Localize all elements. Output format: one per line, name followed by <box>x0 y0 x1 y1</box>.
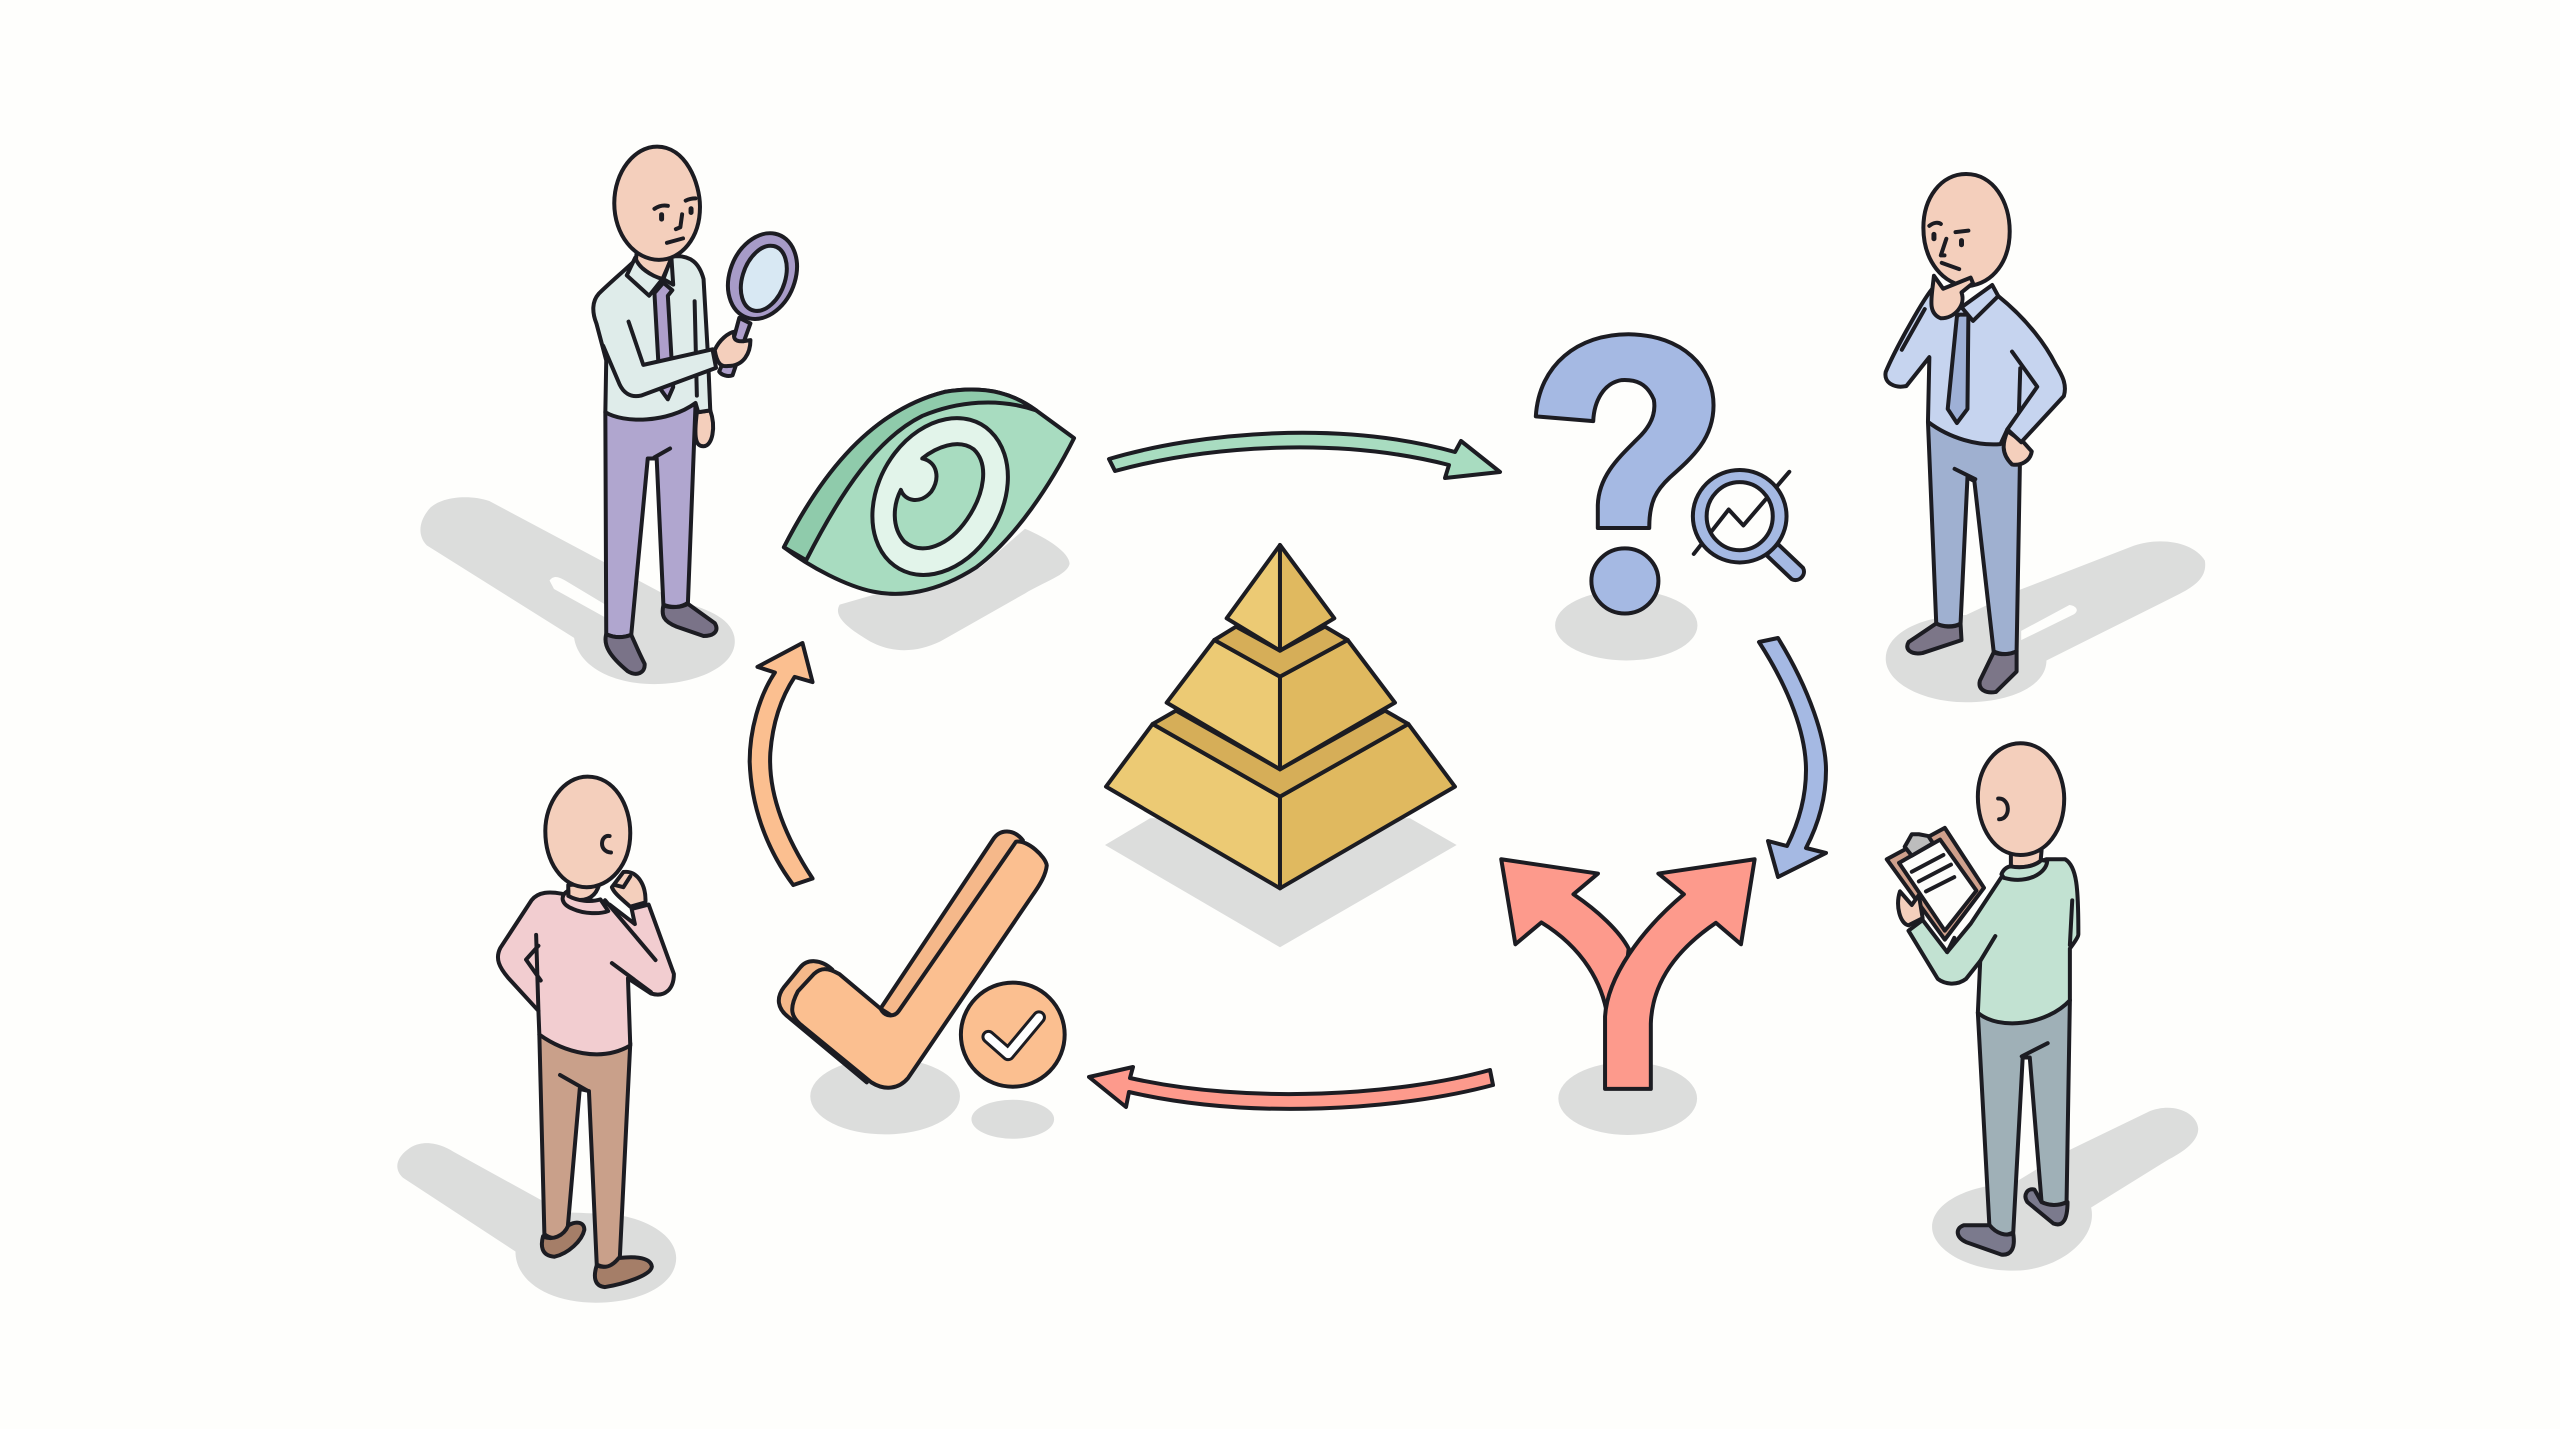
clip <box>1905 834 1933 856</box>
ear <box>602 836 611 853</box>
right branch and stem <box>1605 859 1755 1089</box>
person: analyst with magnifying glass <box>420 147 807 684</box>
question shadow <box>1555 590 1697 660</box>
sleeve line <box>695 301 697 396</box>
paper lines <box>1912 855 1954 891</box>
central pyramid <box>1105 545 1457 947</box>
trousers <box>539 1035 630 1267</box>
person: reviewer with clipboard <box>1887 743 2198 1271</box>
eye icon <box>784 390 1074 650</box>
left branch <box>1501 859 1629 1016</box>
left shoe <box>1958 1225 2014 1255</box>
hand on handle <box>715 332 750 366</box>
magnifier ring <box>718 227 807 325</box>
shadow of reviewer <box>1932 1108 2198 1271</box>
middle left face <box>1167 640 1280 769</box>
pupil <box>895 444 983 548</box>
small magnifier ring <box>1693 470 1787 562</box>
crease <box>654 448 670 457</box>
head <box>614 147 700 260</box>
check back layer <box>779 831 1023 1082</box>
collar <box>2001 860 2047 880</box>
left shoe <box>542 1223 584 1257</box>
middle right face <box>1280 640 1395 769</box>
collar left <box>627 258 662 296</box>
base right face <box>1280 724 1455 888</box>
arm <box>603 322 716 396</box>
trousers <box>1978 1000 2070 1235</box>
tie <box>1948 315 1968 423</box>
chin hand <box>612 872 645 907</box>
base ledge <box>1153 711 1408 797</box>
neck <box>636 253 671 279</box>
top left face <box>1227 545 1280 651</box>
shirt <box>593 256 710 420</box>
right shoe <box>2026 1189 2068 1224</box>
question mark icon <box>1536 334 1804 660</box>
head <box>1923 174 2010 286</box>
right shoe <box>595 1257 652 1287</box>
neck <box>2011 850 2042 867</box>
board <box>1887 828 1984 940</box>
arm detail lines <box>1902 309 2037 429</box>
crease <box>2022 1043 2048 1056</box>
iris <box>849 404 1031 590</box>
face <box>654 198 696 243</box>
ear <box>1998 799 2008 819</box>
trousers <box>1928 422 2020 654</box>
neck <box>568 883 599 900</box>
shadow <box>397 1143 676 1303</box>
face <box>1929 223 1968 269</box>
badge tick fill <box>988 1017 1039 1054</box>
collar <box>1961 285 1998 321</box>
trousers <box>605 405 696 637</box>
fork shadow <box>1558 1062 1697 1135</box>
question hook <box>1536 334 1714 528</box>
shadow of thinker <box>1886 541 2205 702</box>
check front layer <box>792 841 1047 1088</box>
magnifier handle <box>719 318 750 376</box>
right shoe <box>663 604 716 636</box>
hip hand <box>2004 431 2032 465</box>
checkmark icon <box>779 831 1065 1139</box>
eye rim <box>784 390 1036 560</box>
head <box>1978 743 2064 855</box>
check shadow <box>810 1058 960 1134</box>
crease <box>560 1075 587 1090</box>
chart line <box>1694 472 1789 554</box>
collar <box>563 891 608 913</box>
collar right <box>663 258 673 285</box>
tie <box>654 283 673 399</box>
arrow: orange check to eye <box>750 643 813 885</box>
fingers <box>615 876 630 887</box>
arrow: red decision to check <box>1089 1067 1493 1109</box>
arrow: green observe to question <box>1109 433 1500 478</box>
right shoe <box>1980 651 2017 692</box>
question dot <box>1591 548 1658 613</box>
person: thinker with hand on chin <box>1885 174 2205 702</box>
paper <box>1899 840 1976 931</box>
middle ledge <box>1214 627 1348 677</box>
chin hand <box>1931 276 1973 318</box>
clipboard <box>1887 828 1984 940</box>
fork arrow icon <box>1501 859 1755 1135</box>
sweater <box>1908 859 2078 1023</box>
left shoe <box>605 634 645 674</box>
sweater <box>498 893 674 1054</box>
far hand <box>695 410 713 446</box>
top right face <box>1280 545 1334 651</box>
small magnifier handle <box>1766 544 1804 580</box>
eye shadow <box>838 529 1070 650</box>
badge tick outline <box>988 1017 1039 1054</box>
shadow of analyst <box>420 497 735 684</box>
sweater detail lines <box>1947 900 2072 961</box>
badge circle <box>961 983 1065 1087</box>
pyramid shadow <box>1105 818 1457 947</box>
left shoe <box>1907 623 1961 653</box>
person: back view with hand at chin <box>397 777 676 1303</box>
arrow: blue question to decision <box>1759 638 1826 877</box>
eye body <box>784 390 1074 594</box>
head <box>545 777 630 887</box>
base left face <box>1106 724 1280 888</box>
crease <box>1955 469 1975 479</box>
shirt <box>1885 287 2065 444</box>
magnifier lens <box>733 242 794 315</box>
sweater details <box>526 900 656 1011</box>
badge shadow <box>971 1100 1054 1139</box>
hand <box>1898 891 1923 925</box>
